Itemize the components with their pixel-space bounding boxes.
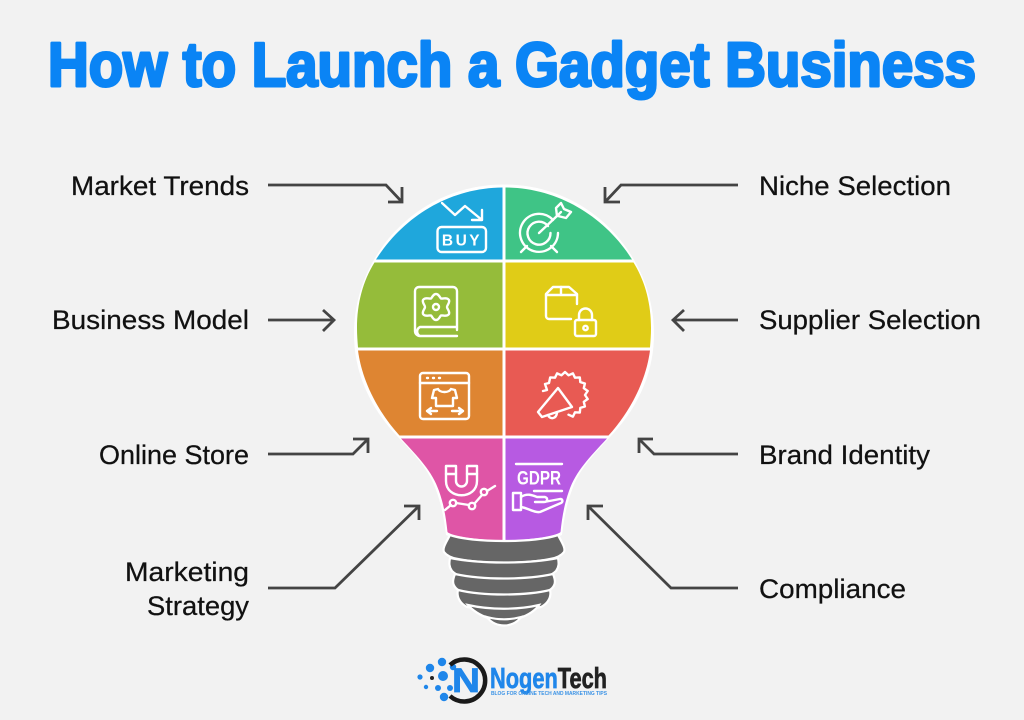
arrow: Online Store bbox=[268, 439, 368, 454]
arrow: Business Model bbox=[268, 310, 334, 331]
arrow: Brand Identity bbox=[639, 439, 738, 454]
icon: online store window bbox=[420, 373, 469, 419]
segment: Niche Selection bbox=[506, 188, 632, 260]
icon: magnet and chart bbox=[445, 466, 495, 510]
arrow: Compliance bbox=[588, 506, 738, 588]
logo tagline: BLOG FOR ONLINE TECH AND MARKETING TIPS bbox=[491, 691, 607, 697]
label: Market Trends: Market Trends bbox=[71, 171, 249, 201]
segment: Online Store bbox=[358, 350, 502, 436]
arrow: Marketing Strategy bbox=[268, 506, 419, 588]
segment: Supplier Selection bbox=[506, 262, 651, 348]
label: Marketing Strategy bbox=[125, 557, 250, 621]
icon: megaphone with badge bbox=[538, 372, 588, 418]
logo ring bbox=[450, 660, 485, 702]
label: Marketing Strategy: Strategy bbox=[147, 591, 250, 621]
icon: box with padlock bbox=[546, 287, 596, 336]
segment: Marketing Strategy bbox=[401, 438, 502, 540]
icon: GDPR hand bbox=[513, 464, 562, 512]
segment: Compliance bbox=[506, 438, 607, 540]
logo bbox=[417, 658, 607, 702]
label: Business Model: Business Model bbox=[52, 305, 249, 335]
logo wordmark: NogenTech bbox=[490, 663, 607, 695]
logo dot: dark bbox=[430, 676, 434, 680]
logo letter N: N bbox=[452, 662, 480, 700]
icon: book with gear bbox=[415, 287, 457, 336]
icon: buy and falling trend: BUY bbox=[442, 232, 482, 250]
label: Supplier Selection: Supplier Selection bbox=[759, 305, 981, 335]
label: Marketing Strategy: Marketing bbox=[125, 557, 249, 587]
arrow: Niche Selection bbox=[605, 185, 738, 202]
segment: Brand Identity bbox=[506, 350, 650, 436]
logo dots bbox=[417, 658, 456, 701]
arrow: Supplier Selection bbox=[673, 310, 738, 331]
screw base bbox=[444, 535, 564, 626]
label: Online Store: Online Store bbox=[99, 440, 249, 470]
label: Brand Identity: Brand Identity bbox=[759, 440, 931, 470]
arrow: Market Trends bbox=[268, 185, 402, 202]
icon: GDPR hand: GDPR bbox=[517, 468, 561, 490]
icon: buy and falling trend bbox=[438, 203, 486, 252]
icon: target bbox=[520, 203, 571, 252]
label: Niche Selection: Niche Selection bbox=[759, 171, 951, 201]
segment: Business Model bbox=[357, 262, 502, 348]
light bulb bbox=[354, 184, 654, 626]
label: Compliance: Compliance bbox=[759, 574, 906, 604]
segment: Market Trends bbox=[376, 188, 502, 260]
bulb outline bbox=[354, 184, 654, 541]
